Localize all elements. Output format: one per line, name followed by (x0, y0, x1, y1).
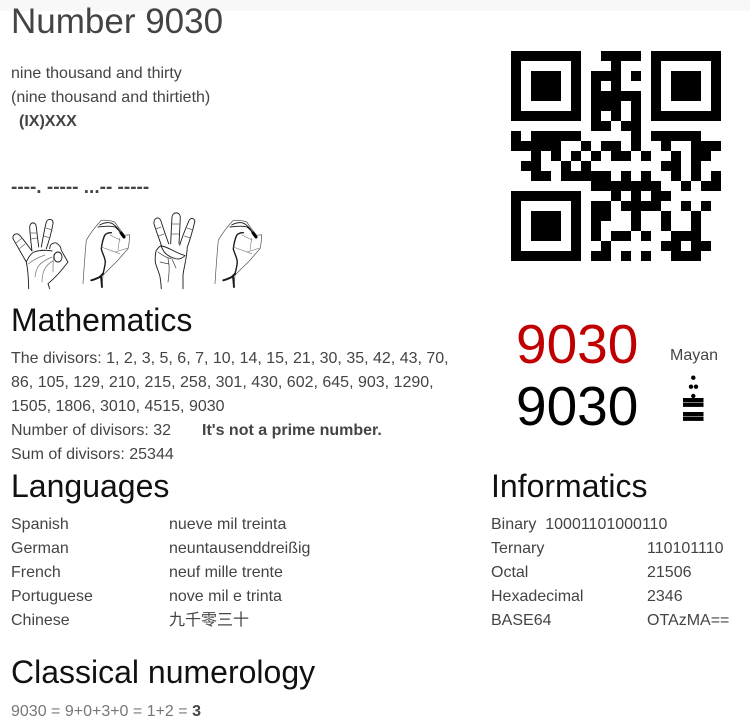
divisors text block: 86, 105, 129, 210, 215, 258, 301, 430, 602, 645, 903, 1290, (11, 374, 434, 391)
languages table: nove mil e trinta (169, 588, 282, 605)
informatics table: BASE64 (491, 612, 551, 629)
Mayan label: Mayan (670, 347, 718, 364)
divisors text block: It's not a prime number. (202, 422, 382, 439)
divisors text block: 1505, 1806, 3010, 4515, 9030 (11, 398, 225, 415)
top bar (0, 0, 750, 11)
heading: Classical numerology: Classical numerology (11, 654, 315, 690)
languages table: Portuguese (11, 588, 93, 605)
languages table: Spanish (11, 516, 69, 533)
title: Number 9030 (11, 2, 223, 41)
icon: fist sign 0 repeated (215, 220, 262, 287)
informatics table: 21506 (647, 564, 692, 581)
morse code: ----. ----- ...-- ----- (11, 177, 149, 198)
languages table: nueve mil treinta (169, 516, 286, 533)
informatics table: Ternary (491, 540, 544, 557)
numerology sum: 9030 = 9+0+3+0 = 1+2 = 3 (11, 703, 201, 720)
informatics table (491, 516, 729, 629)
icon: sign language hands (12, 212, 262, 290)
languages table: Chinese (11, 612, 70, 629)
big number red: 9030 (516, 313, 638, 375)
QR code (511, 51, 721, 261)
icon: hand sign 3 (154, 213, 195, 289)
languages table: French (11, 564, 61, 581)
heading: Mathematics: Mathematics (11, 302, 192, 338)
languages table (11, 516, 310, 629)
icon: hand sign 9 (13, 219, 68, 289)
icon: fist sign 0 (83, 220, 130, 287)
informatics table: Hexadecimal (491, 588, 583, 605)
big number black: 9030 (516, 375, 638, 437)
icon: Mayan numeral (683, 376, 704, 421)
number name in words (11, 65, 210, 130)
informatics table: OTAzMA== (647, 612, 729, 629)
heading: Languages: Languages (11, 468, 169, 504)
heading: Informatics: Informatics (491, 468, 647, 504)
languages table: neuf mille trente (169, 564, 283, 581)
divisors text block: Sum of divisors: 25344 (11, 446, 174, 463)
informatics table: 110101110 (647, 540, 724, 557)
number name in words: (nine thousand and thirtieth) (11, 89, 210, 106)
languages table: neuntausenddreißig (169, 540, 310, 557)
languages table: 九千零三十 (169, 612, 249, 629)
number name in words: nine thousand and thirty (11, 65, 182, 82)
number name in words: (IX)XXX (19, 113, 77, 130)
divisors text block (11, 350, 449, 463)
languages table: German (11, 540, 69, 557)
informatics table: Binary 10001101000110 (491, 516, 667, 533)
informatics table: Octal (491, 564, 528, 581)
divisors text block: The divisors: 1, 2, 3, 5, 6, 7, 10, 14, 15, 21, 30, 35, 42, 43, 70, (11, 350, 449, 367)
informatics table: 2346 (647, 588, 683, 605)
divisors text block: Number of divisors: 32 (11, 422, 171, 439)
